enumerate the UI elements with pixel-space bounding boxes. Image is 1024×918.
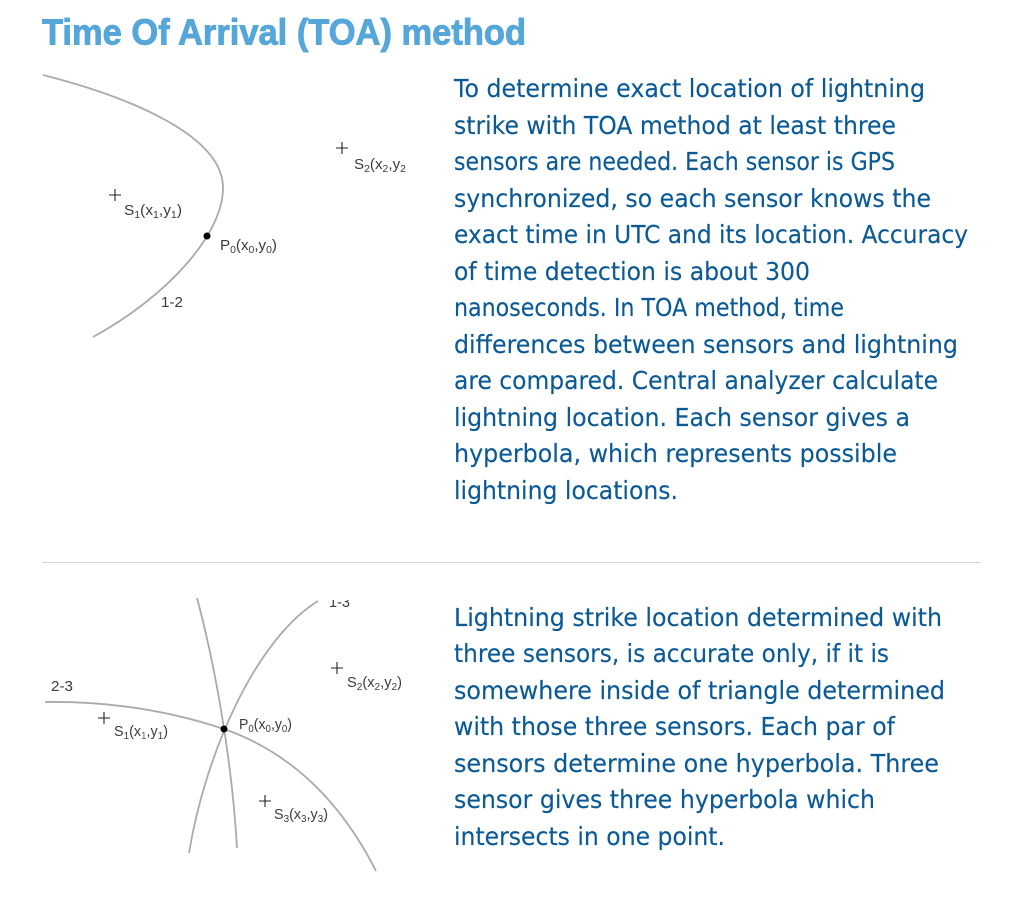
sensor S2: ): [397, 675, 402, 691]
hyperbola 1-3: [189, 601, 318, 853]
sensor S1: 1: [171, 210, 177, 221]
sensor S1: ,y: [159, 203, 172, 219]
sensor S2: [331, 662, 402, 693]
sensor S2: 2: [392, 682, 398, 693]
sensor S2: 2: [357, 682, 363, 693]
sensor S1: 1: [141, 731, 147, 742]
text block: three sensors explanation: somewhere inside of triangle determined: [454, 676, 945, 705]
diagram: three hyperbolas intersecting: [45, 595, 402, 871]
text block: TOA method explanation: differences between sensors and lightning: [454, 330, 958, 359]
text block: TOA method explanation: exact time in UTC and its location. Accuracy: [454, 220, 968, 249]
sensor S3: ): [323, 807, 328, 823]
curve label 1-2: 1-2: [161, 295, 183, 311]
point P0: 0: [266, 724, 271, 735]
sensor S3: ,y: [307, 807, 318, 823]
point P0: [220, 717, 292, 735]
text block: TOA method explanation: synchronized, so each sensor knows the: [454, 184, 931, 213]
text block: TOA method explanation: nanoseconds. In TOA method, time: [454, 293, 844, 322]
sensor S1: S: [114, 724, 124, 740]
text block: three sensors explanation: with those three sensors. Each par of: [454, 712, 896, 741]
sensor S3: 3: [284, 814, 290, 825]
sensor S1: 1: [124, 731, 130, 742]
sensor S1: 1: [153, 210, 159, 221]
curve label 2-3: 2-3: [51, 679, 73, 695]
point P0: 0: [282, 724, 288, 735]
text block: TOA method explanation: are compared. Central analyzer calculate: [454, 366, 938, 395]
sensor S2: (x: [370, 157, 383, 173]
sensor S1: S: [124, 203, 134, 219]
sensor S1: ): [163, 724, 168, 740]
sensor S1: ): [177, 203, 182, 219]
point P0: 0: [248, 724, 254, 735]
sensor S2: (x: [362, 675, 375, 691]
text block: TOA method explanation: To determine exact location of lightning: [453, 74, 925, 103]
point P0: ,y: [254, 238, 267, 254]
sensor S1: [98, 712, 168, 742]
point P0: P: [220, 238, 230, 254]
sensor S3: 3: [318, 814, 324, 825]
sensor S3: 3: [301, 814, 307, 825]
sensor S2: 2: [375, 682, 381, 693]
title: Time Of Arrival (TOA) method: [42, 12, 526, 52]
sensor S3: S: [274, 807, 284, 823]
text block: three sensors explanation: [454, 603, 945, 851]
point P0: 0: [266, 245, 272, 256]
point P0: ,y: [271, 717, 283, 733]
text block: three sensors explanation: sensor gives three hyperbola which: [454, 785, 875, 814]
sensor S1: ,y: [147, 724, 158, 740]
point P0: [204, 232, 277, 256]
sensor S2: ,y: [380, 675, 392, 691]
sensor S2: S: [354, 157, 364, 173]
text block: TOA method explanation: lightning location. Each sensor gives a: [454, 403, 910, 432]
point P0: P: [239, 717, 249, 733]
text block: TOA method explanation: lightning locations.: [454, 476, 678, 505]
text block: three sensors explanation: sensors determine one hyperbola. Three: [454, 749, 939, 778]
hyperbola 1-2: [43, 75, 223, 337]
point P0: 0: [249, 245, 255, 256]
sensor S3: [259, 795, 328, 825]
sensor S2: ,y: [388, 157, 401, 173]
text block: TOA method explanation: [453, 74, 968, 505]
point P0: (x: [236, 238, 249, 254]
sensor S1: (x: [129, 724, 142, 740]
sensor S1: 1: [134, 210, 141, 221]
text block: three sensors explanation: intersects in one point.: [454, 822, 725, 851]
point P0: (x: [254, 717, 266, 733]
text block: TOA method explanation: hyperbola, which represents possible: [454, 439, 897, 468]
text block: TOA method explanation: strike with TOA method at least three: [454, 111, 896, 140]
point P0: 0: [230, 245, 236, 256]
sensor S2: 2: [383, 164, 389, 175]
sensor S3: (x: [289, 807, 302, 823]
curve label 1-3: 1-3: [329, 595, 350, 611]
sensor S2: S: [347, 675, 357, 691]
text block: TOA method explanation: sensors are needed. Each sensor is GPS: [454, 147, 895, 176]
sensor S1: [109, 189, 182, 221]
sensor S1: 1: [158, 731, 164, 742]
hyperbola 2-3: [45, 702, 376, 871]
hyperbola 1-2: [197, 598, 237, 848]
text block: three sensors explanation: Lightning strike location determined with: [454, 603, 942, 632]
text block: TOA method explanation: of time detection is about 300: [454, 257, 810, 286]
text block: three sensors explanation: three sensors, is accurate only, if it is: [454, 639, 889, 668]
diagram: single hyperbola between sensors 1 and 2: [43, 75, 406, 337]
sensor S2: 2: [400, 164, 406, 175]
sensor S1: (x: [140, 203, 154, 219]
sensor S2: [336, 142, 406, 175]
sensor S2: 2: [364, 164, 370, 175]
point P0: ): [272, 238, 277, 254]
point P0: ): [287, 717, 292, 733]
